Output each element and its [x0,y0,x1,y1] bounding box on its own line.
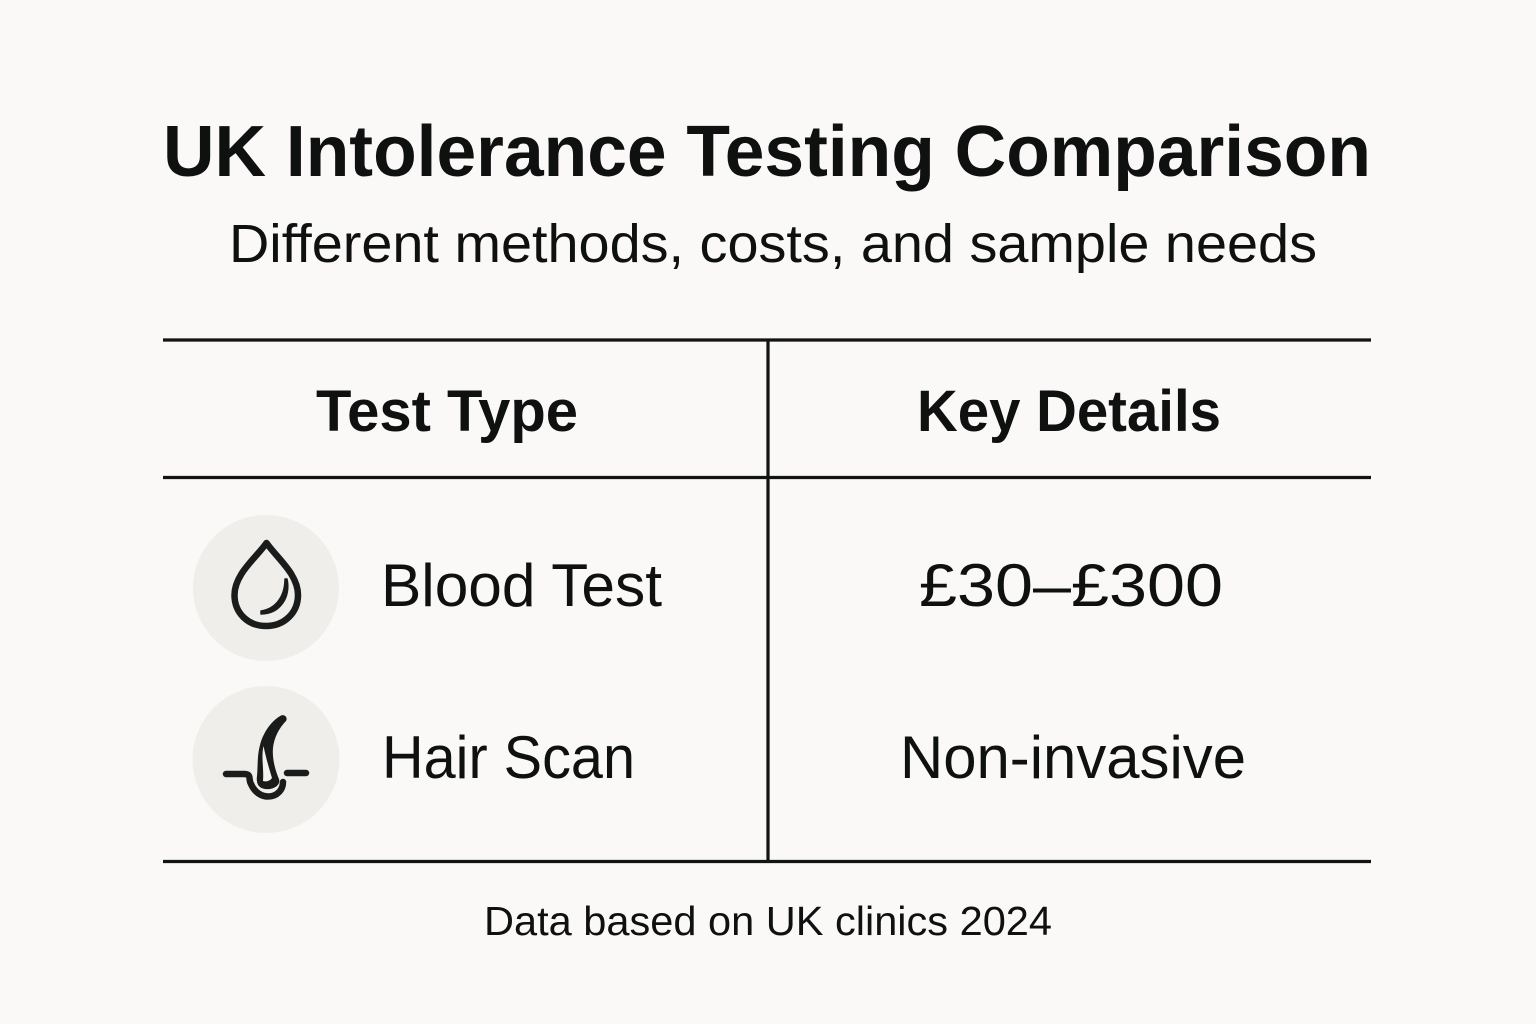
column heading: test type: Test Type [316,379,578,444]
comparison table [163,340,1371,862]
footnote: Data based on UK clinics 2024 [484,898,1052,944]
subtitle: Different methods, costs, and sample needs [229,214,1317,274]
icon: hair follicle [192,686,340,833]
title: UK Intolerance Testing Comparison [163,112,1371,192]
label: blood test: Blood Test [381,552,662,619]
value: blood test cost: £30–£300 [919,552,1223,619]
label: hair scan: Hair Scan [382,724,635,791]
icon: blood drop [193,515,339,661]
column heading: key details: Key Details [917,379,1221,444]
value: hair scan detail: Non-invasive [900,724,1246,791]
